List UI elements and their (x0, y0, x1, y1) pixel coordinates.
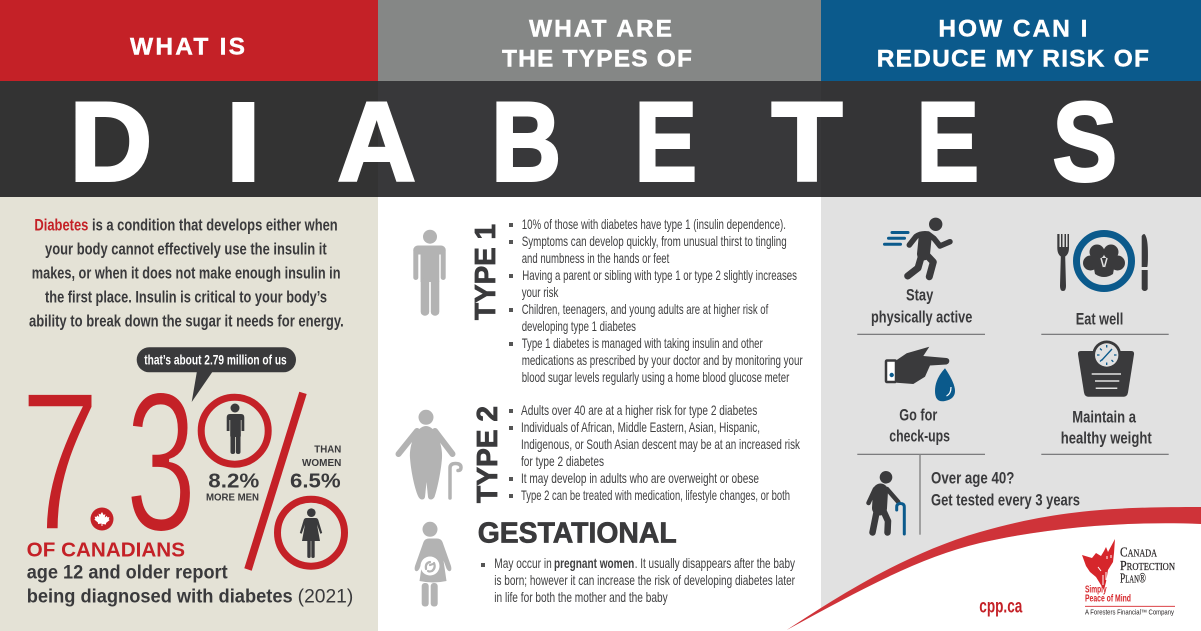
text: over age 40 get tested (931, 468, 1080, 509)
list: type 1 facts: developing type 1 diabetes (522, 318, 636, 334)
list: type 1 facts: your risk (522, 284, 559, 300)
label: stay physically active: Stay (906, 286, 934, 305)
big statistic: 7.3 percent: 7 (20, 351, 100, 573)
icon: plate with fork and knife (1057, 234, 1148, 291)
text: over age 40 get tested: Over age 40? (931, 468, 1014, 487)
white corner under swoosh (787, 523, 1201, 631)
label: eat well: Eat well (1076, 309, 1123, 328)
icon: pregnant woman (415, 522, 451, 606)
icon: older person with cane (868, 471, 904, 534)
label: go for check-ups: Go for (899, 406, 938, 425)
list: type 1 facts: and numbness in the hands or feet (522, 250, 669, 266)
title: diabetes: E (634, 80, 697, 204)
list: type 2 facts (509, 402, 801, 503)
label: maintain a healthy weight: healthy weight (1061, 428, 1152, 447)
title: diabetes: E (916, 80, 979, 204)
title: diabetes (0, 80, 1201, 204)
callout: 2.79 million (137, 347, 296, 402)
label: stay physically active (871, 286, 972, 327)
logo: canada protection plan: Simply (1085, 585, 1107, 596)
panel: types background (378, 197, 821, 631)
ring: men (201, 397, 268, 464)
big statistic: 7.3 percent (20, 351, 344, 574)
title: diabetes: I (226, 80, 261, 204)
logo: canada protection plan: Canada (1120, 546, 1158, 561)
list: type 2 facts: Adults over 40 are at a higher risk for type 2 diabetes (521, 402, 757, 418)
icon: type 1 person (413, 230, 446, 316)
list: gestational facts: pregnant women (554, 555, 634, 571)
logo: canada protection plan: Plan® (1120, 571, 1146, 586)
header: what are the types of: WHAT ARE (529, 16, 672, 43)
text block: definition of diabetes (29, 216, 344, 331)
logo: canada protection plan: Peace of Mind (1085, 594, 1131, 605)
icon: weight scale (1078, 340, 1134, 397)
logo: canada protection plan: Protection (1120, 559, 1175, 574)
list: gestational facts: . It usually disappears after the baby (635, 555, 795, 571)
stat: men 8.2% (206, 470, 260, 504)
logo: canada protection plan (1082, 539, 1175, 616)
list: gestational facts: in life for both the mother and the baby (494, 589, 668, 605)
stat: women 6.5%: THAN (314, 445, 341, 456)
text: age 12 and older report: age 12 and older report (27, 562, 228, 583)
label: maintain a healthy weight: Maintain a (1072, 408, 1136, 427)
title: diabetes: B (491, 80, 561, 204)
list: gestational facts: May occur in (494, 555, 552, 571)
label: go for check-ups: check-ups (889, 427, 950, 446)
callout: 2.79 million: that’s about 2.79 million of us (144, 351, 287, 367)
stat: men 8.2%: 8.2% (208, 470, 260, 492)
header: how can i reduce my risk of (821, 0, 1201, 81)
list: type 2 facts: Indigenous, or South Asian descent may be at an increased risk (521, 436, 801, 452)
text block: definition of diabetes: Diabetes (34, 216, 88, 235)
logo: canada protection plan: A Foresters Financial™ Company (1085, 609, 1174, 616)
list: type 2 facts: Type 2 can be treated with medication, lifestyle changes, or both (521, 487, 790, 503)
panel: what is background (0, 197, 378, 631)
icon: runner (884, 218, 950, 277)
icon: red maple leaf (1082, 539, 1115, 590)
list: type 1 facts: Children, teenagers, and young adults are at higher risk of (522, 301, 768, 317)
label: stay physically active: physically active (871, 308, 972, 327)
list: type 1 facts: Type 1 diabetes is managed with taking insulin and other (522, 335, 763, 351)
heading: gestational: GESTATIONAL (478, 518, 677, 550)
stat: women 6.5% (290, 445, 341, 492)
icon: type 2 person with cane (398, 410, 461, 500)
label: maintain a healthy weight (1061, 408, 1152, 447)
header: what are the types of: THE TYPES OF (502, 46, 692, 73)
icon: finger and blood drop (886, 347, 955, 401)
title: diabetes: A (338, 80, 416, 204)
panel: reduce risk background (821, 197, 1201, 631)
percent slash (244, 392, 307, 571)
list: type 2 facts: Individuals of African, Middle Eastern, Asian, Hispanic, (521, 419, 760, 435)
text block: definition of diabetes: makes, or when it does not make enough insulin in (32, 264, 341, 283)
list: type 1 facts: blood sugar levels regularly using a home blood glucose meter (522, 369, 790, 385)
ring: women (278, 499, 344, 566)
text block: definition of diabetes: is a condition that develops either when (92, 216, 338, 235)
text block: definition of diabetes: your body cannot effectively use the insulin it (45, 240, 327, 259)
list: type 1 facts: medications as prescribed by your doctor and by monitoring your (522, 352, 803, 368)
heading: type 1: TYPE 1 (470, 224, 502, 320)
header: how can i reduce my risk of: REDUCE MY RISK OF (877, 46, 1149, 73)
list: gestational facts (481, 555, 795, 605)
stat: women 6.5%: WOMEN (302, 458, 341, 469)
list: type 1 facts: Symptoms can develop quickly, from unusual thirst to tingling (522, 233, 787, 249)
icon: woman (300, 508, 322, 558)
list: type 2 facts: for type 2 diabetes (521, 453, 604, 469)
title: diabetes: S (1053, 80, 1117, 204)
header: what is: WHAT IS (130, 34, 245, 60)
text block: definition of diabetes: the first place. Insulin is critical to your body’s (45, 288, 327, 307)
text: cpp.ca: cpp.ca (979, 596, 1023, 617)
header: what are the types of (378, 0, 821, 81)
divider rows (857, 334, 1169, 535)
list: type 1 facts: Having a parent or sibling with type 1 or type 2 slightly increases (522, 267, 797, 283)
title: diabetes: T (772, 80, 842, 204)
red swoosh (787, 507, 1201, 630)
stat: women 6.5%: 6.5% (290, 470, 341, 492)
text block: definition of diabetes: ability to break down the sugar it needs for energy. (29, 312, 344, 331)
title: diabetes: D (69, 80, 152, 204)
icon: maple leaf decimal point (90, 508, 114, 530)
header: what is (0, 0, 378, 81)
text: over age 40 get tested: Get tested every 3 years (931, 490, 1080, 509)
label: go for check-ups (889, 406, 950, 446)
list: type 1 facts: 10% of those with diabetes have type 1 (insulin dependence). (522, 216, 786, 232)
heading: type 2: TYPE 2 (472, 406, 504, 503)
list: gestational facts: is born; however it can increase the risk of developing diabetes later (494, 572, 795, 588)
list: type 2 facts: It may develop in adults who are overweight or obese (521, 470, 759, 486)
list: type 1 facts (509, 216, 803, 385)
text: being diagnosed with diabetes 2021: being diagnosed with diabetes (27, 586, 293, 607)
header: how can i reduce my risk of: HOW CAN I (938, 16, 1087, 43)
text: of canadians: OF CANADIANS (27, 540, 185, 562)
stat: men 8.2%: MORE MEN (206, 493, 259, 504)
text: being diagnosed with diabetes 2021: (2021) (298, 586, 353, 607)
big statistic: 7.3 percent: 3 (126, 352, 196, 574)
icon: man (227, 404, 244, 454)
